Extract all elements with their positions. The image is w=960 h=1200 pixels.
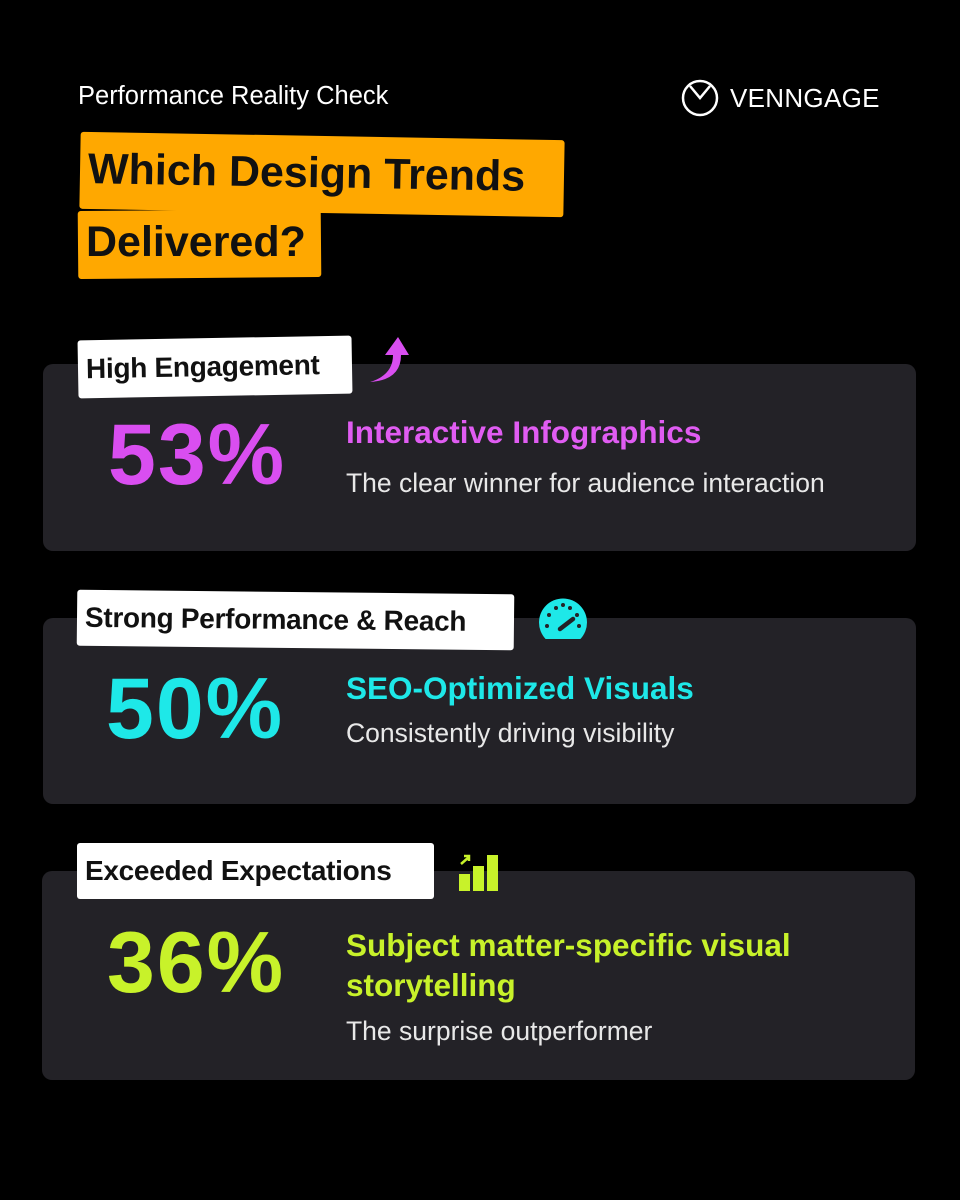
text: seo: SEO-Optimized Visuals [346,670,694,706]
label: exceeded: Exceeded Expectations [85,855,392,886]
title: Delivered? [86,218,306,266]
text: The surprise outperformer [346,1016,652,1046]
text: storytelling: Subject matter-specific visual [346,927,791,963]
label: exceeded [77,843,434,899]
text: storytelling: storytelling [346,967,516,1003]
logo: VENNGAGE [730,82,880,112]
panel: strong performance [43,618,916,804]
text: The clear winner for audience interaction [346,468,825,498]
label: strong performance: Strong Performance & Reach [85,602,466,637]
panel: exceeded [42,871,915,1080]
stat 36%: 36% [107,915,285,1011]
panel: high engagement [43,364,916,551]
title [78,132,565,279]
icon: bar chart [459,854,498,891]
label: strong performance [77,590,514,650]
subtitle: Performance Reality Check [78,82,388,110]
stat 53%: 53% [108,407,286,503]
title: Which Design Trends [88,145,526,201]
stat 50%: 50% [106,661,284,757]
text: Consistently driving visibility [346,718,674,748]
text: interactive: Interactive Infographics [346,414,701,450]
icon: arrow up [370,337,409,382]
logo [682,80,880,116]
label: high engagement [78,336,352,398]
icon: speedometer [539,598,587,639]
text: storytelling [346,927,791,1003]
label: high engagement: High Engagement [86,349,320,384]
